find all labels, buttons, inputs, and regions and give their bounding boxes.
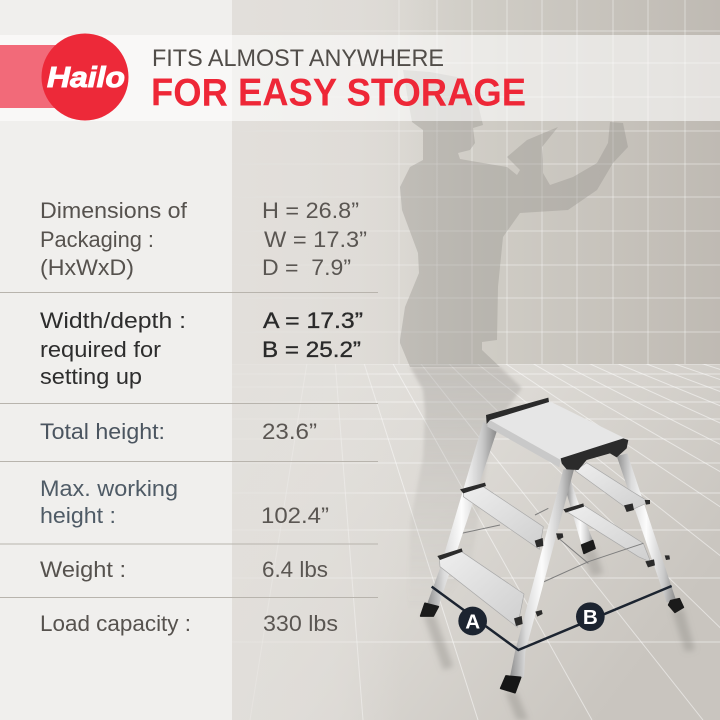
row: packaging dimensions: (HxWxD) [40, 255, 134, 280]
dimension lines [432, 586, 672, 650]
left panel [0, 0, 232, 720]
row: load capacity [40, 611, 338, 636]
logo: Hailo: Hailo [47, 62, 125, 94]
row: total height: 23.6” [262, 419, 317, 444]
title [151, 45, 526, 114]
left leg [427, 422, 497, 607]
row: max working height: height : [40, 503, 116, 528]
row: packaging dimensions: Dimensions of [40, 198, 188, 223]
front steps [463, 487, 543, 549]
row: width and depth: setting up [40, 364, 142, 389]
marker B: B [583, 606, 598, 629]
black caps and clips [437, 398, 670, 626]
row: width and depth: Width/depth : [40, 308, 186, 333]
silhouette: worker with drill [400, 70, 628, 610]
row: width and depth: B = 25.2” [262, 337, 361, 362]
row: max working height: 102.4” [261, 503, 329, 528]
row: packaging dimensions [40, 198, 367, 280]
row: weight [40, 557, 328, 582]
header band [0, 35, 720, 121]
background floor [280, 364, 720, 720]
row: packaging dimensions: W = 17.3” [264, 227, 367, 252]
row: load capacity: Load capacity : [40, 611, 191, 636]
row: width and depth [40, 308, 363, 389]
row: packaging dimensions: Packaging : [40, 227, 154, 252]
background wall [232, 0, 720, 365]
rear legs [567, 480, 594, 547]
row: max working height: Max. working [40, 476, 178, 501]
logo: Hailo [0, 34, 128, 120]
stays [458, 508, 643, 582]
front leg [510, 469, 574, 677]
row: width and depth: A = 17.3” [263, 308, 363, 333]
marker A: A [465, 610, 480, 633]
marker A [458, 607, 487, 635]
top platform [488, 401, 628, 460]
row: max working height [40, 476, 329, 528]
row: total height: Total height: [40, 419, 165, 444]
row: weight: Weight : [40, 557, 126, 582]
row: width and depth: required for [40, 337, 162, 362]
step ladder [421, 398, 695, 720]
rear steps [575, 463, 649, 511]
row: total height [40, 419, 317, 444]
row: packaging dimensions: D = 7.9” [262, 255, 351, 280]
row: packaging dimensions: H = 26.8” [262, 198, 359, 223]
spec table [0, 198, 378, 636]
row: load capacity: 330 lbs [263, 611, 338, 636]
title: FOR EASY STORAGE [151, 72, 526, 114]
row: weight: 6.4 lbs [262, 557, 328, 582]
marker B [576, 602, 605, 631]
title: FITS ALMOST ANYWHERE [152, 45, 444, 72]
